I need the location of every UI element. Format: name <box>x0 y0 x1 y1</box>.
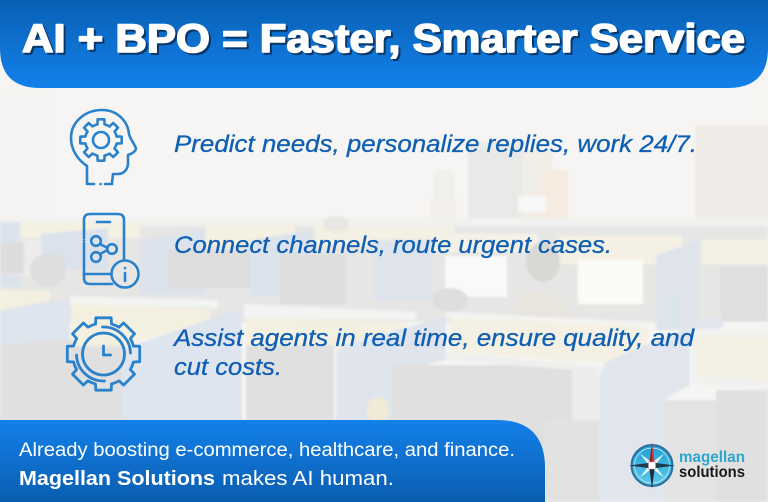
text: assist agents: Assist agents in real time, ensure quality, and <box>172 325 695 352</box>
title banner <box>0 0 768 88</box>
text: assist agents: cut costs. <box>174 354 282 381</box>
back row of cubicles <box>0 216 768 330</box>
footer text line 1: Already boosting e-commerce, healthcare, and finance. <box>19 440 515 461</box>
footer panel <box>0 420 545 502</box>
text: predict needs: Predict needs, personalize replies, work 24/7. <box>174 131 697 158</box>
wall window and staff <box>430 142 568 232</box>
icon: gear with clock <box>67 317 140 391</box>
logo wordmark <box>679 449 745 481</box>
logo: Magellan Solutions <box>629 442 745 488</box>
text: connect channels: Connect channels, route urgent cases. <box>174 232 612 259</box>
title: AI + BPO = Faster, Smarter Service <box>24 19 747 63</box>
icon: AI head with gear <box>71 110 136 184</box>
footer text line 2: makes AI human. <box>222 468 394 490</box>
text: assist agents <box>172 325 695 381</box>
icon: phone with share and info <box>84 214 138 288</box>
footer text line 2: Magellan Solutions <box>19 468 215 490</box>
footer text line 2 <box>19 468 394 490</box>
logo wordmark: solutions <box>679 464 745 481</box>
icon: compass <box>629 442 675 488</box>
logo wordmark: magellan <box>679 449 745 466</box>
title: AI + BPO = Faster, Smarter Service <box>22 17 745 61</box>
front row of cubicles <box>0 290 768 502</box>
wall board <box>695 125 768 237</box>
